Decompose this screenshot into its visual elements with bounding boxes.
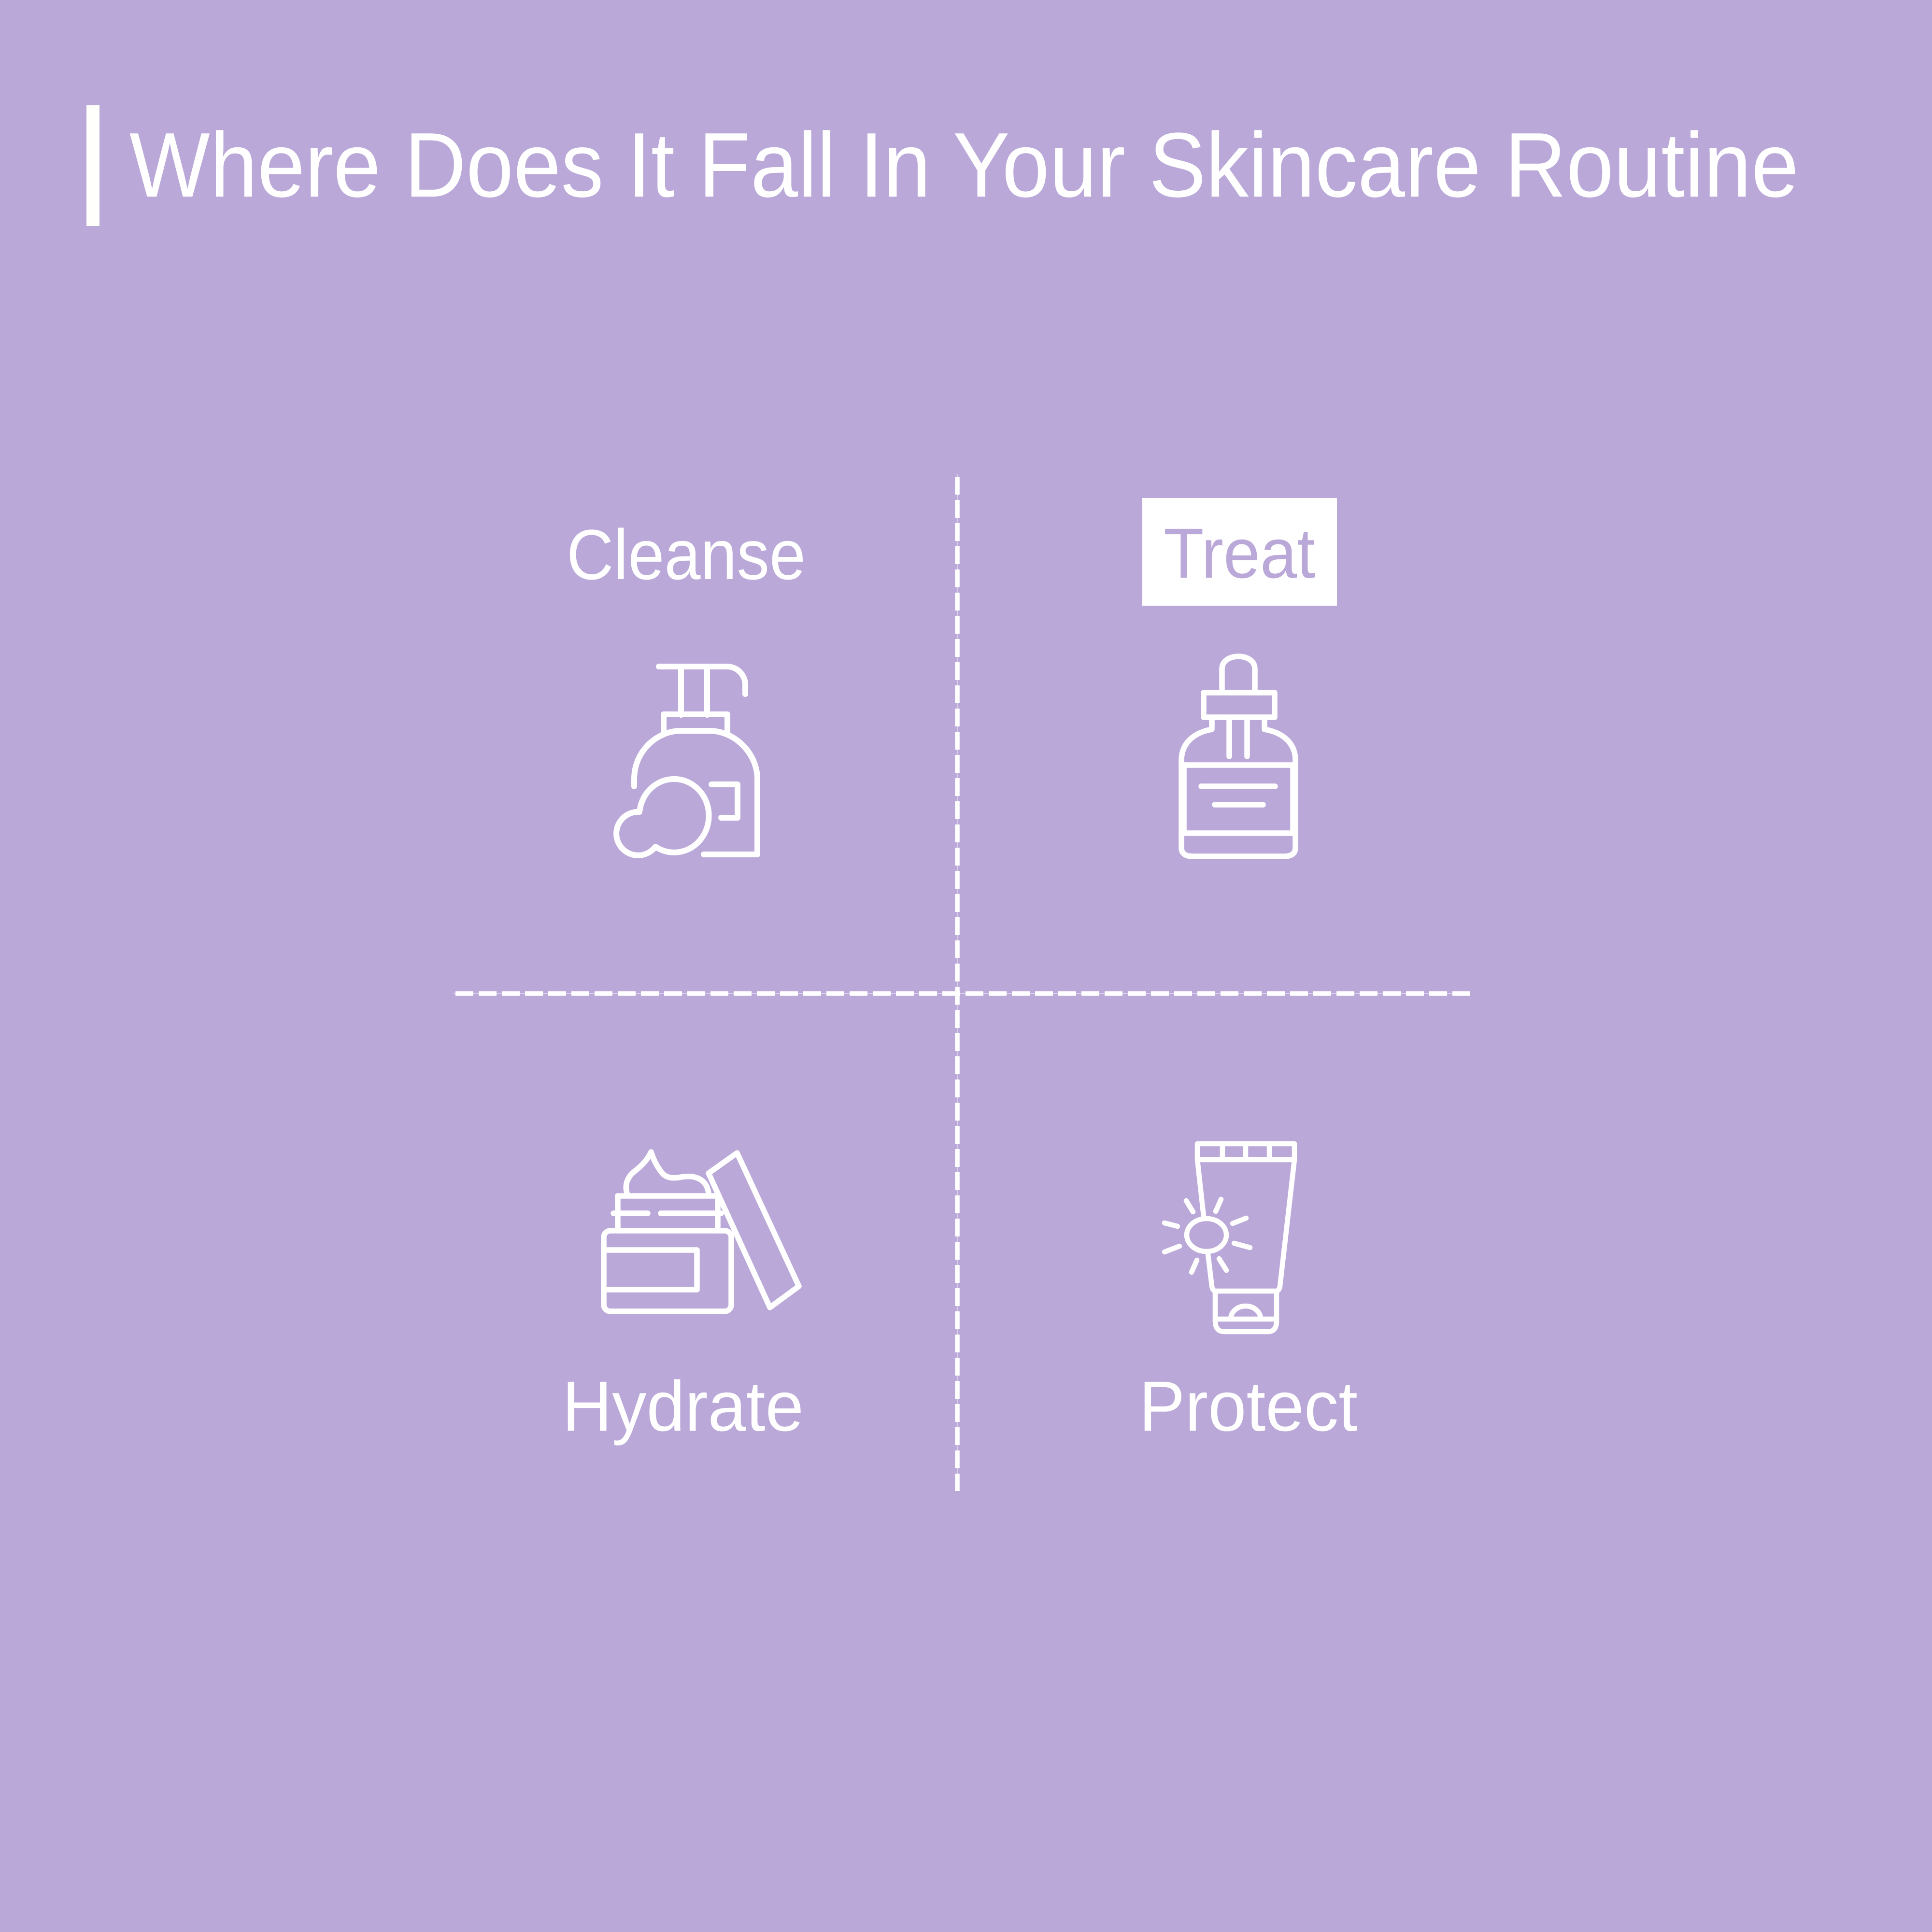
heading: Protect: Protect xyxy=(1139,1367,1358,1446)
panel: cleanse xyxy=(567,515,806,855)
icon: pump bottle with foam xyxy=(616,667,757,855)
icon: sunscreen tube with sun xyxy=(1165,1144,1294,1332)
heading: Treat: Treat xyxy=(1164,514,1315,593)
title accent bar xyxy=(86,105,99,226)
vertical dashed divider xyxy=(957,474,958,1491)
heading: Cleanse: Cleanse xyxy=(567,515,806,595)
heading: Hydrate: Hydrate xyxy=(562,1367,804,1446)
panel: treat xyxy=(1142,498,1337,856)
panel: hydrate xyxy=(562,1152,804,1446)
icon: dropper bottle xyxy=(1181,656,1295,856)
title: Where Does It Fall In Your Skincare Routine xyxy=(129,114,1799,216)
horizontal dashed divider xyxy=(454,993,1470,994)
heading highlight box xyxy=(1142,498,1337,606)
panel: protect xyxy=(1139,1144,1358,1446)
icon: cream jar with lid xyxy=(604,1152,799,1311)
